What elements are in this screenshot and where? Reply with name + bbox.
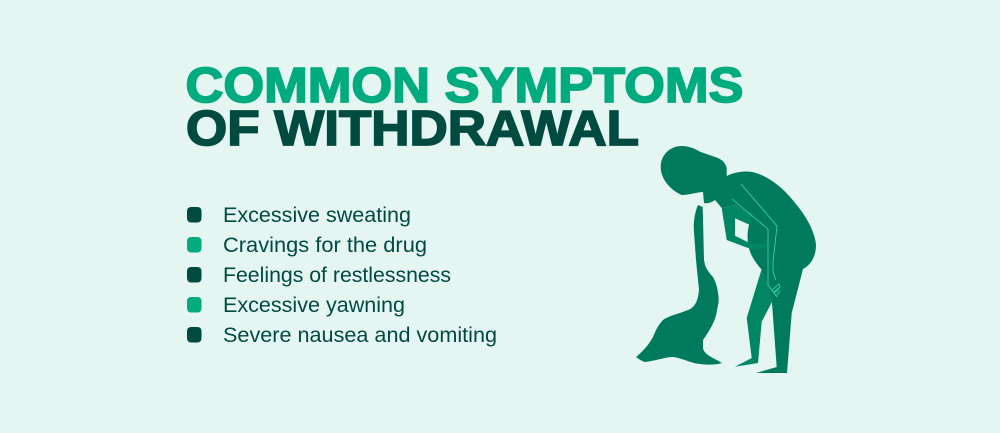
- title: [186, 59, 744, 156]
- item 3: Feelings of restlessness: [223, 264, 451, 287]
- inner arm line: [732, 199, 777, 297]
- far leg: [735, 268, 773, 367]
- item 2: Cravings for the drug: [223, 234, 427, 257]
- far arm: [722, 205, 768, 250]
- bullet 3: [187, 267, 202, 282]
- bullet 2: [187, 237, 202, 252]
- hair: [636, 205, 722, 365]
- symptom list: [187, 204, 497, 347]
- outer arm line: [741, 184, 777, 280]
- icon: bent-over figure: [636, 146, 816, 373]
- arm outline: [732, 184, 780, 297]
- fingers: [772, 284, 780, 296]
- item 5: Severe nausea and vomiting: [223, 324, 497, 347]
- item 4: Excessive yawning: [223, 294, 405, 317]
- title line 2: OF WITHDRAWAL: [186, 102, 639, 156]
- body and head: [661, 146, 816, 373]
- bullet 5: [187, 327, 202, 342]
- bullet 4: [187, 297, 202, 312]
- item 1: Excessive sweating: [223, 204, 411, 227]
- bullet 1: [187, 207, 202, 222]
- title line 1: COMMON SYMPTOMS: [186, 59, 744, 113]
